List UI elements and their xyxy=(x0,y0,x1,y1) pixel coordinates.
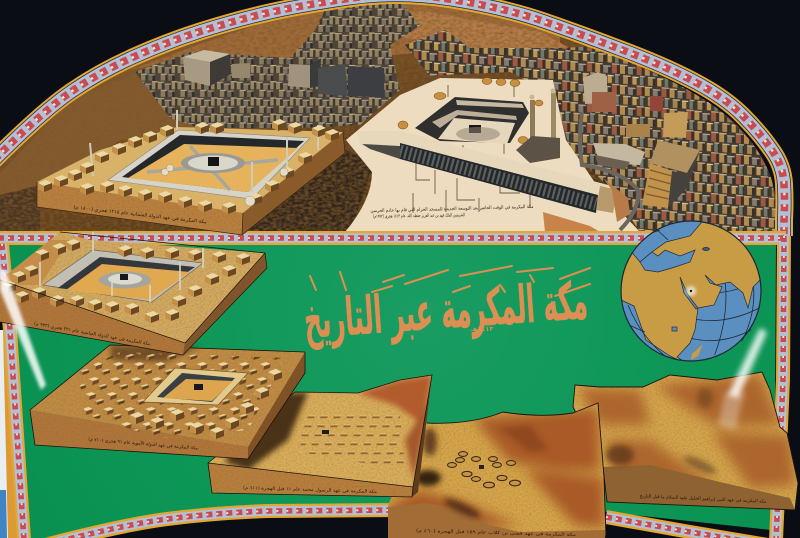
kaaba xyxy=(194,384,203,390)
slab outline xyxy=(0,232,267,355)
slab: time of the Prophet xyxy=(205,370,437,497)
slab front face xyxy=(208,463,413,497)
caption: مكة المكرمة في عهد الدولة الأموية عام ٩١ هجري (٧١٠ م) xyxy=(88,436,199,452)
low complex xyxy=(593,143,645,170)
village pattern xyxy=(78,352,285,438)
top surface xyxy=(0,232,265,343)
domes xyxy=(398,78,543,144)
slab outline xyxy=(573,372,798,510)
terrain xyxy=(385,400,610,538)
glare streak: left xyxy=(0,268,46,390)
Madagascar xyxy=(691,344,703,360)
paving cross xyxy=(147,146,278,190)
slab outline xyxy=(208,375,432,497)
large towers xyxy=(183,50,688,138)
houses xyxy=(2,239,250,323)
shadowed back xyxy=(110,345,200,362)
courtyard xyxy=(128,144,298,192)
graticule on Atlantic side xyxy=(628,230,668,356)
Kaaba xyxy=(456,125,500,141)
tall orange building xyxy=(642,140,700,208)
caption: مكة المكرمة في عهد الدولة العباسية عام ٣٢١ هجري (٩٣٣ م) xyxy=(34,321,151,347)
slab: early Arabian era xyxy=(385,400,610,538)
mosque enclosure xyxy=(143,368,248,405)
courtyard xyxy=(163,379,233,401)
terrain xyxy=(209,376,432,486)
roads xyxy=(580,112,638,230)
sand patch xyxy=(543,212,600,232)
panel: aerial view arch xyxy=(0,0,800,232)
caption: present day: مكة المكرمة في الوقت الحاضر بعد التوسعة الجديدة للمسجد الحرام التي قام بها خادم الحرمين xyxy=(370,204,534,214)
caption: مكة المكرمة في عهد الرسول محمد عام ١١ قبل الهجرة (٦١١ م) xyxy=(243,485,378,495)
mosque enclosure xyxy=(43,250,203,302)
kaaba xyxy=(208,157,219,166)
mataf circle xyxy=(181,153,245,173)
slab side face xyxy=(412,375,432,497)
slab: prehistoric era xyxy=(570,370,800,515)
front houses xyxy=(130,369,282,439)
terrain xyxy=(570,370,800,515)
oceans and seas xyxy=(622,222,760,360)
ornamental border: arch xyxy=(0,0,784,236)
Grand Mosque inner gallery xyxy=(415,97,529,143)
cityscape behind historic slab xyxy=(135,0,420,128)
title calligraphy xyxy=(302,266,590,351)
arcades xyxy=(122,135,304,192)
slab outline xyxy=(30,345,305,459)
right face xyxy=(183,253,267,355)
Grand Mosque courtyard xyxy=(438,118,515,144)
slab: Ottoman era xyxy=(37,110,345,235)
page edge strip: white and blue xyxy=(0,330,26,538)
left face xyxy=(37,182,243,235)
title calligraphy: ١٤١٣هـ xyxy=(470,325,493,333)
outline xyxy=(621,221,761,361)
long colonnade building xyxy=(362,143,614,213)
slab outline xyxy=(427,403,606,538)
minarets and mosque front xyxy=(516,88,560,163)
gallery xyxy=(157,373,235,402)
slab outline xyxy=(37,132,345,235)
ornamental border: lower frame xyxy=(0,236,786,538)
caption: مكة المكرمة في عهد قصي بن كلاب عام ١٥٩ قبل الهجرة (٤٦٠ م) xyxy=(416,528,577,538)
minarets xyxy=(90,110,318,192)
globe xyxy=(620,220,762,362)
top surface xyxy=(30,345,305,447)
kaaba xyxy=(322,430,329,434)
caption: present day xyxy=(370,204,534,220)
domes xyxy=(162,164,288,206)
panel: green background xyxy=(4,244,776,538)
cityscape on the right xyxy=(405,30,778,232)
glare streak: right xyxy=(718,328,767,430)
perimeter houses xyxy=(38,119,339,214)
plaza xyxy=(345,78,640,232)
graticule over ocean xyxy=(692,283,760,355)
slab: Umayyad era xyxy=(30,345,305,459)
left face xyxy=(30,410,248,459)
courtyard xyxy=(66,264,190,300)
top surface xyxy=(37,127,343,213)
right face xyxy=(242,132,345,235)
slab: Abbasid era xyxy=(0,232,267,355)
Makkah marker xyxy=(686,286,696,296)
lamp posts on plaza xyxy=(413,85,530,213)
slab base xyxy=(573,407,798,510)
caption: مكة المكرمة في عهد الدولة العثمانية عام ١٢١٥ هجري (١٨٠٠ م) xyxy=(73,205,207,226)
mosque roof ring xyxy=(108,130,310,199)
caption: present day: الشريفين الملك فهد بن عبد العزيز حفظه الله. عام ١٤١٣ هجري (١٩٩٢م) xyxy=(373,212,465,220)
central shrine xyxy=(479,465,484,469)
caption: مكة المكرمة في عهد النبي إبراهيم الخليل عليه السلام ما قبل التاريخ xyxy=(639,493,767,505)
tents and huts xyxy=(448,452,520,488)
right face xyxy=(248,352,305,459)
gallery xyxy=(58,257,195,298)
circular court and kaaba xyxy=(99,272,151,288)
land mass xyxy=(621,221,761,361)
left face xyxy=(0,280,185,355)
minarets xyxy=(40,232,203,302)
terrain: hills and mountain xyxy=(0,0,800,232)
